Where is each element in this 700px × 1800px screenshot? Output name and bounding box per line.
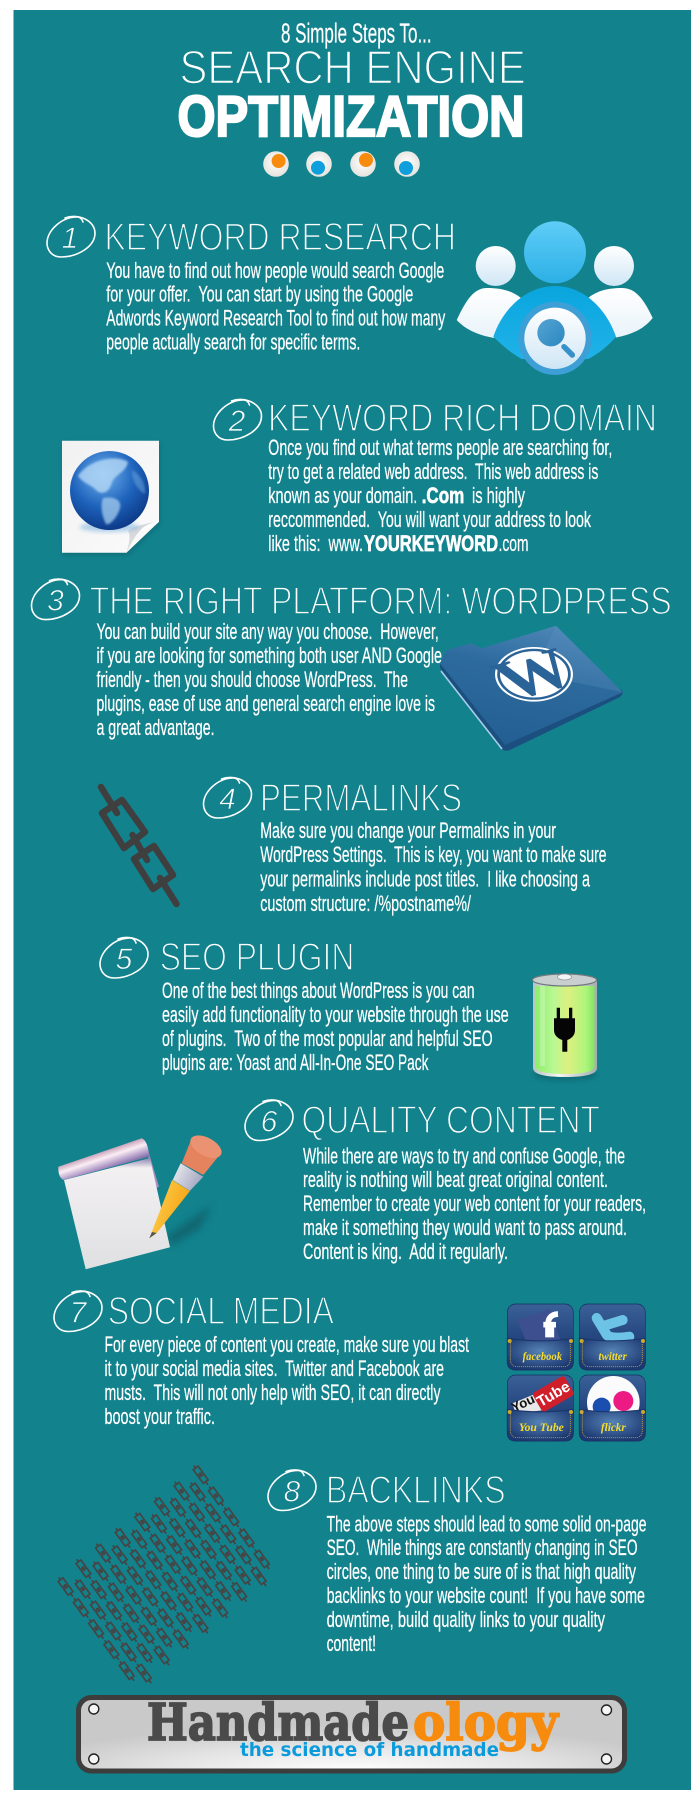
body text 5: plugins are: Yoast and All-In-One SEO Pack <box>162 1050 429 1075</box>
title line 2: OPTIMIZATION <box>178 85 524 149</box>
footer logo plate <box>78 1692 624 1771</box>
body text 6 <box>303 1143 646 1264</box>
number badge 2: 2 <box>228 405 246 438</box>
icon: notepad and pencil <box>58 1131 225 1269</box>
heading 1: KEYWORD RESEARCH <box>104 216 456 259</box>
body text 3: friendly - then you should choose WordPress. The <box>96 667 408 692</box>
body text 7: musts. This will not only help with SEO, it can directly <box>104 1380 441 1405</box>
step 1: keyword research <box>47 216 653 375</box>
body text 8: content! <box>327 1631 376 1656</box>
number badge 4 <box>204 777 252 818</box>
number badge 2 <box>214 399 262 440</box>
number badge 7: 7 <box>70 1296 88 1330</box>
number badge 8: 8 <box>284 1476 301 1508</box>
icon grid: social pockets <box>507 1304 645 1441</box>
step 5: seo plugin <box>100 936 597 1081</box>
icon: flickr: flickr <box>601 1422 626 1434</box>
body text 1: You have to find out how people would search Google <box>106 258 444 283</box>
step 3: the right platform <box>32 579 672 751</box>
step 4: permalinks <box>101 777 606 916</box>
step 8: backlinks <box>50 1464 647 1692</box>
body text 6: Content is king. Add it regularly. <box>303 1239 508 1264</box>
icon: twitter: twitter <box>598 1351 627 1363</box>
icon: youtube: You Tube <box>519 1422 564 1434</box>
icon: wordpress folder <box>440 626 623 751</box>
number badge 8 <box>268 1470 316 1510</box>
step 6: quality content <box>58 1099 646 1269</box>
icon: users with magnifier <box>457 221 653 375</box>
body text 3: a great advantage. <box>96 715 214 740</box>
icon: youtube: You <box>509 1391 537 1415</box>
icon: youtube <box>507 1375 575 1441</box>
heading 6: QUALITY CONTENT <box>302 1099 600 1142</box>
icon: battery with plug <box>532 974 597 1081</box>
heading 5: SEO PLUGIN <box>160 936 354 979</box>
number badge 1: 1 <box>62 222 78 255</box>
number badge 3 <box>32 579 80 620</box>
icon: facebook: facebook <box>523 1351 562 1363</box>
number badge 1 <box>47 216 95 257</box>
logo wordmark orange: ology <box>413 1692 559 1752</box>
body text 3: You can build your site any way you choose. However, <box>96 619 439 644</box>
body text 2: .Com <box>422 483 464 508</box>
body text 2 <box>268 435 612 556</box>
body text 2: known as your domain. <box>268 483 417 508</box>
icon: document with globe <box>62 441 160 555</box>
body text 1: people actually search for specific terms. <box>106 330 360 355</box>
decorative dots <box>263 151 420 177</box>
number badge 6 <box>245 1100 293 1140</box>
body text 2: like this: www. <box>268 531 363 556</box>
heading 8: BACKLINKS <box>326 1469 506 1512</box>
body text 8 <box>327 1512 646 1656</box>
body text 4: custom structure: /%postname%/ <box>260 891 471 916</box>
number badge 5: 5 <box>116 943 133 976</box>
heading 7: SOCIAL MEDIA <box>108 1290 334 1333</box>
body text 5 <box>162 978 509 1075</box>
number badge 6: 6 <box>261 1106 278 1138</box>
body text 7 <box>104 1332 469 1429</box>
body text 1: for your offer. You can start by using the Google <box>106 282 413 307</box>
step 2: keyword rich domain <box>62 397 657 556</box>
body text 2: is highly <box>472 483 525 508</box>
body text 3: if you are looking for something both user AND Google <box>96 643 442 668</box>
body text 7: boost your traffic. <box>104 1404 215 1429</box>
body text 1 <box>106 258 446 355</box>
number badge 3: 3 <box>47 584 64 618</box>
body text 5: One of the best things about WordPress is you can <box>162 978 475 1003</box>
header <box>178 18 526 177</box>
title line 1: SEARCH ENGINE <box>180 40 526 94</box>
body text 7: For every piece of content you create, make sure you blast <box>104 1332 469 1357</box>
body text 2: .com <box>498 531 528 556</box>
body text 1: Adwords Keyword Research Tool to find out how many <box>106 306 446 331</box>
body text 4 <box>260 818 606 916</box>
icon: wordpress folder: W <box>480 635 588 713</box>
logo wordmark dark: Handmade <box>147 1692 409 1752</box>
icon: youtube: Tube <box>534 1378 573 1411</box>
number badge 5 <box>100 937 148 978</box>
body text 5: of plugins. Two of the most popular and helpful SEO <box>162 1026 493 1051</box>
metal plate <box>78 1698 624 1771</box>
body text 5: easily add functionality to your website through the use <box>162 1002 509 1027</box>
step 7: social media <box>54 1290 645 1441</box>
body text 3: plugins, ease of use and general search engine love is <box>96 691 435 716</box>
number badge 4: 4 <box>219 783 236 816</box>
body text 3 <box>96 619 442 740</box>
heading 4: PERMALINKS <box>260 777 462 820</box>
body text 2: YOURKEYWORD <box>364 531 498 556</box>
icon: array of chains <box>50 1464 285 1692</box>
body text 7: it to your social media sites. Twitter and Facebook are <box>104 1356 444 1381</box>
icon: chain <box>101 787 176 904</box>
subtitle: 8 Simple Steps To... <box>281 18 432 49</box>
number badge 7 <box>54 1291 102 1332</box>
logo tagline: the science of handmade <box>240 1739 499 1761</box>
rivets <box>89 1704 612 1764</box>
